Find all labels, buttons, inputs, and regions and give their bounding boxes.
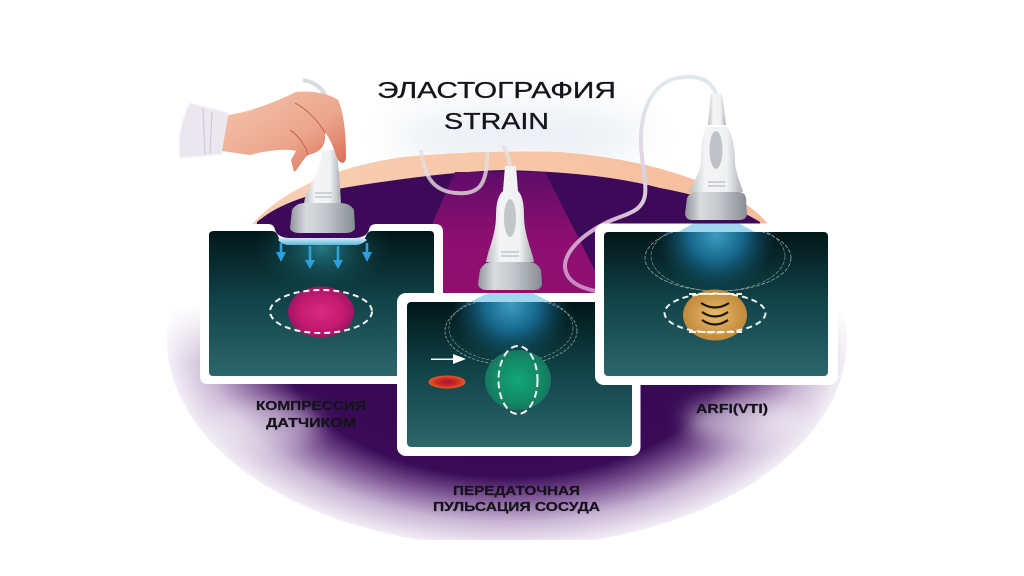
title: STRAIN	[444, 108, 549, 134]
body dome: skin and tissue	[250, 152, 770, 300]
panel screen	[604, 232, 828, 376]
icon: compression arrows	[276, 243, 372, 269]
label: vessel pulsation	[433, 484, 600, 514]
purple lower bloom	[167, 314, 847, 540]
icon: white arrow	[431, 354, 466, 364]
title	[377, 77, 616, 134]
middle probe cable	[421, 146, 510, 193]
beam top	[678, 224, 755, 232]
hand	[222, 91, 346, 172]
panel: compression	[200, 224, 443, 384]
lesion: green	[485, 346, 551, 414]
label: vessel pulsation: ПЕРЕДАТОЧНАЯ	[453, 484, 580, 498]
label: probe compression	[256, 399, 366, 430]
probe: right	[685, 94, 747, 220]
panel: ARFI	[595, 224, 838, 385]
probe: left	[290, 80, 355, 233]
right probe cable	[565, 77, 716, 292]
sleeve	[179, 103, 228, 158]
panel frame	[397, 293, 640, 456]
icon: hand holding probe	[179, 91, 346, 172]
panel screen	[407, 302, 632, 447]
probe: middle	[478, 166, 542, 290]
label: probe compression: ДАТЧИКОМ	[266, 416, 356, 430]
label: ARFI: ARFI(VTI)	[696, 402, 768, 416]
label: vessel pulsation: ПУЛЬСАЦИЯ СОСУДА	[433, 500, 600, 514]
beam top	[470, 293, 550, 302]
label: probe compression: КОМПРЕССИЯ	[256, 399, 366, 413]
infographic	[167, 75, 847, 540]
icon: red vessel	[428, 376, 466, 388]
lesion: magenta	[270, 286, 372, 338]
panel screen	[209, 231, 434, 376]
title: ЭЛАСТОГРАФИЯ	[377, 77, 616, 103]
panel frame	[595, 224, 838, 385]
background haze behind title	[390, 109, 650, 161]
lesion: gold	[664, 290, 766, 340]
icon: compression glow strip	[278, 238, 367, 245]
panel frame	[200, 224, 443, 384]
panel: vessel pulsation	[397, 293, 640, 456]
